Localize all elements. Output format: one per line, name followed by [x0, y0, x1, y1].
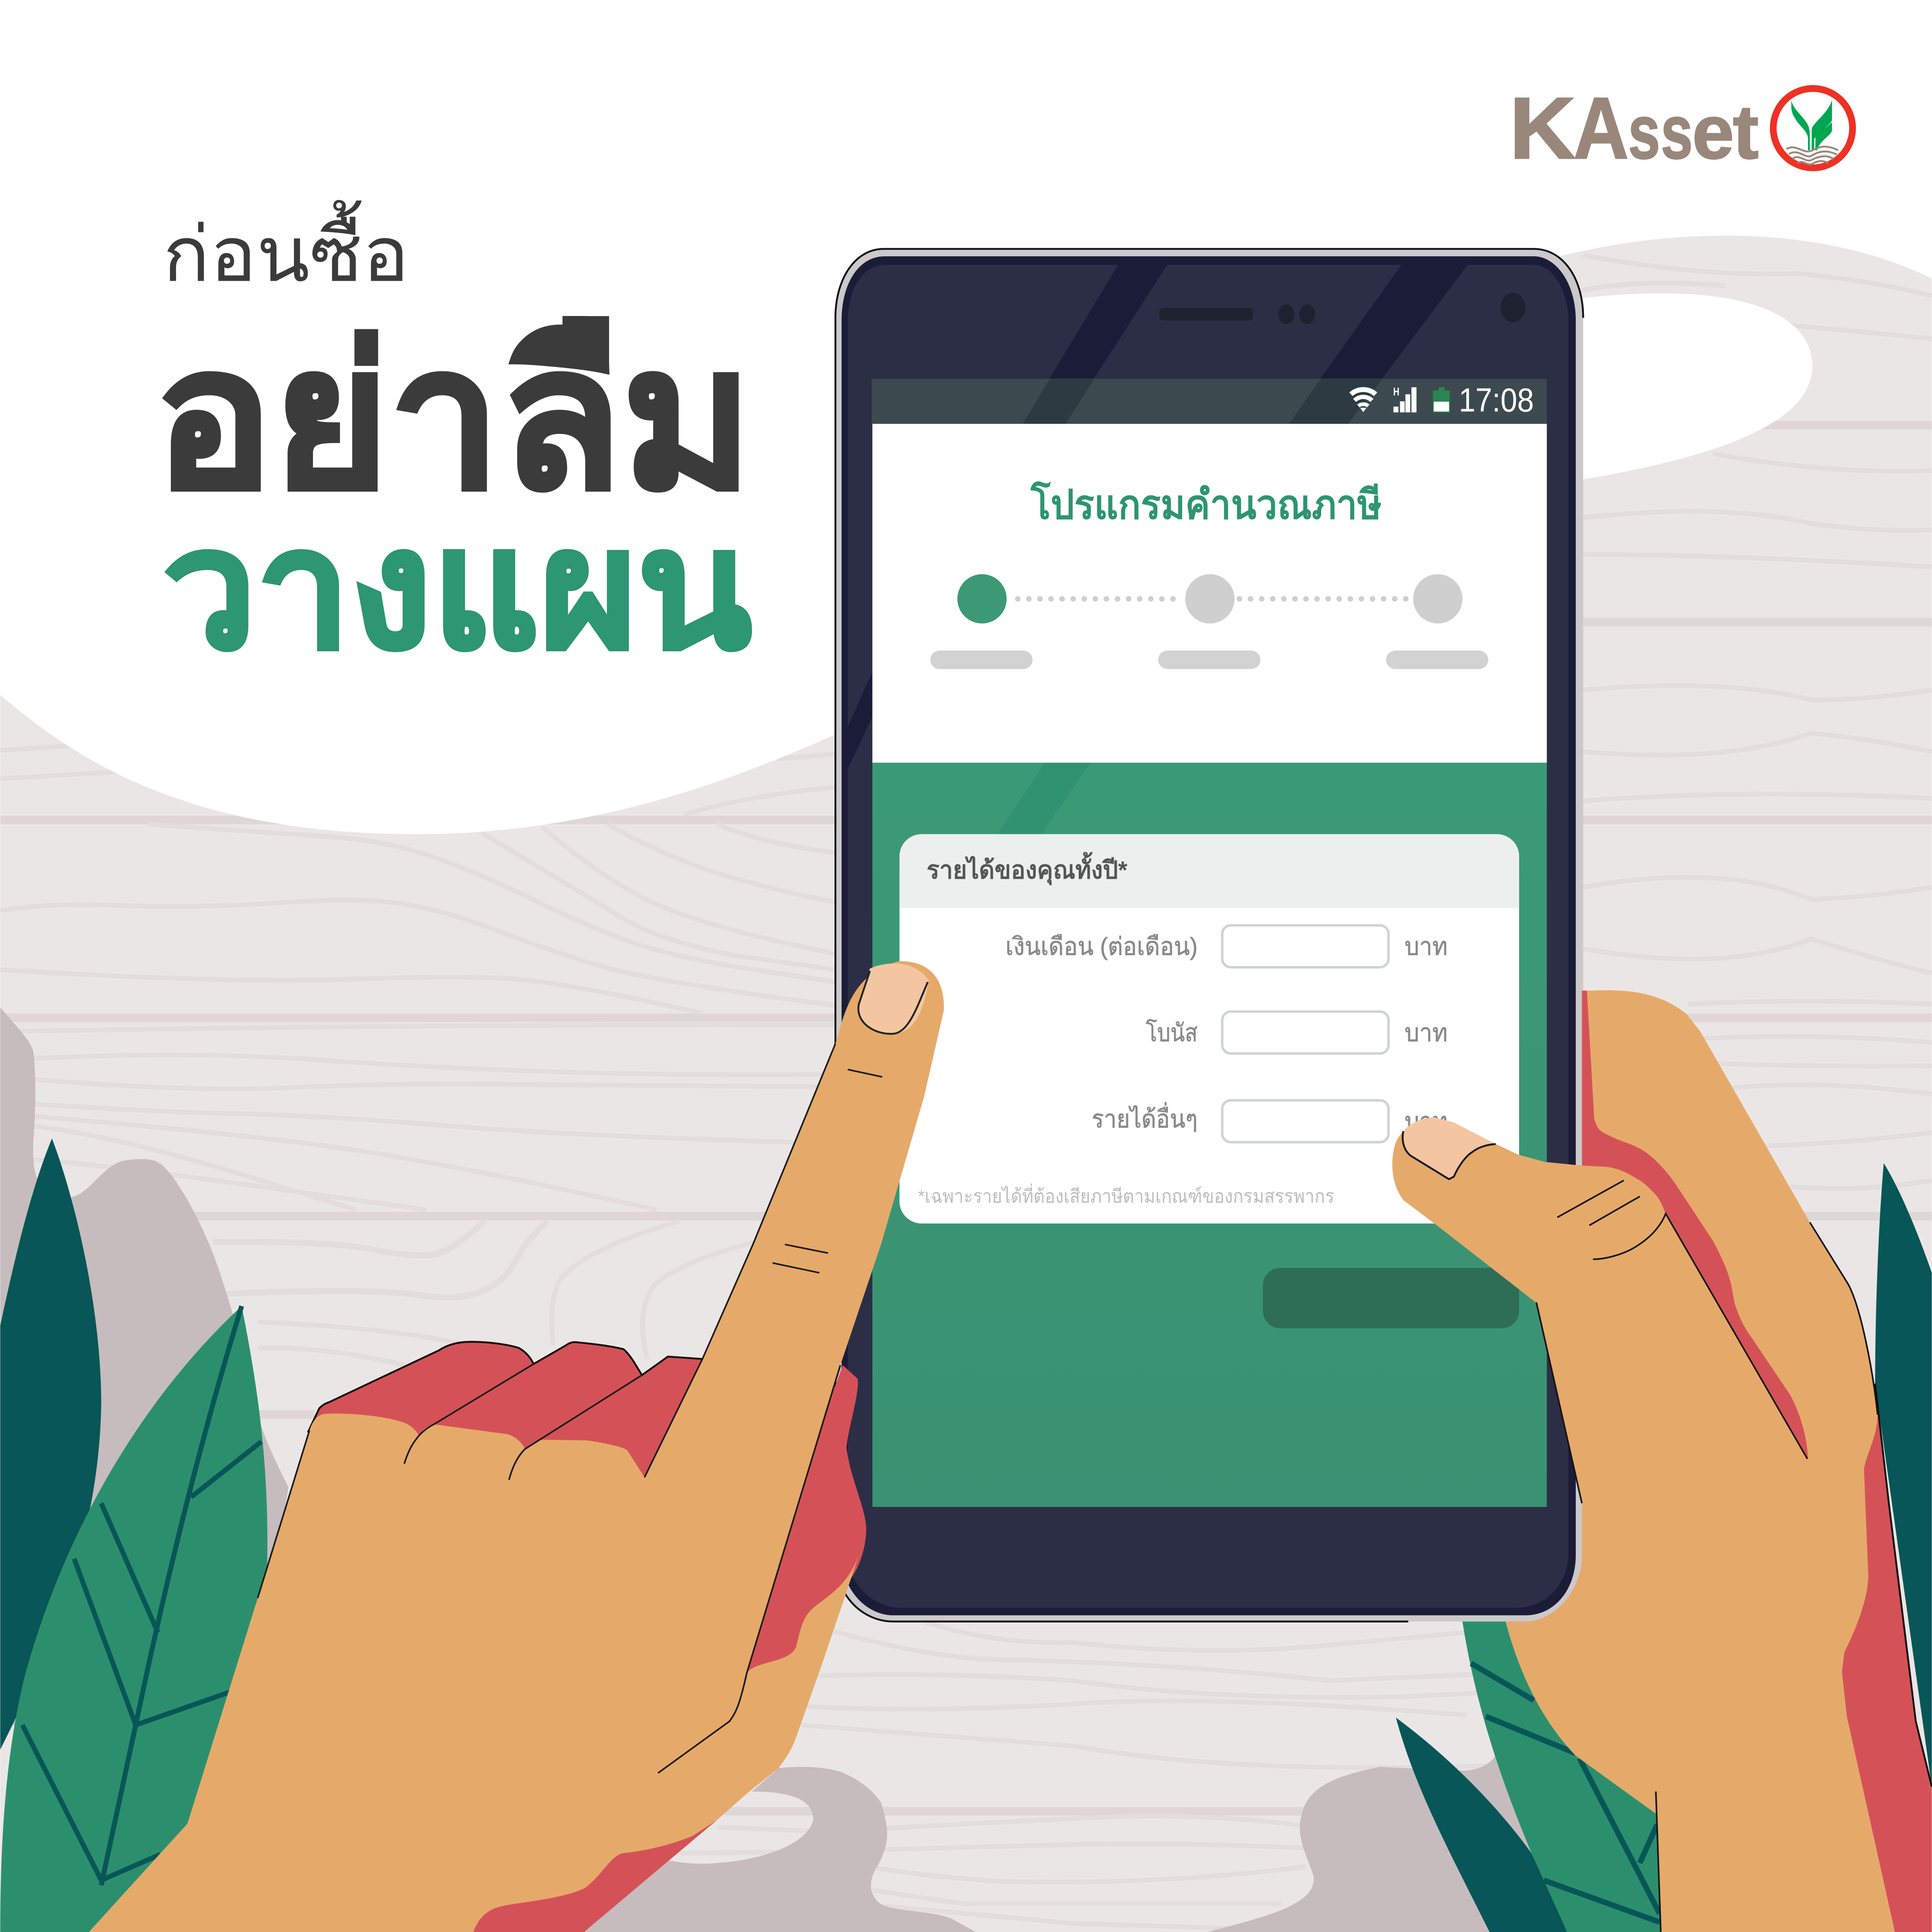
screen white — [872, 424, 1547, 762]
sensors — [1278, 304, 1315, 324]
logo wordmark: e — [1692, 89, 1734, 175]
leaf: dark bottom right — [1396, 1718, 1567, 1932]
status bar — [872, 379, 1547, 424]
wrist shadow — [473, 1820, 717, 1932]
leaf: dark right — [1875, 1163, 1932, 1786]
hand skin — [1392, 990, 1895, 1932]
icon: signal: H — [1393, 386, 1399, 398]
grey rock left — [0, 1007, 288, 1725]
KAsset logo — [1509, 80, 1853, 177]
card header — [900, 834, 1519, 908]
thumbnail — [1403, 1118, 1496, 1179]
title line 1: ก่อนซื้อ — [163, 200, 409, 297]
row: other income: บาท — [1404, 1108, 1448, 1136]
hand creases — [1536, 1180, 1877, 1932]
clock: 17:08 — [1459, 382, 1534, 419]
phone — [835, 249, 1583, 1622]
income card — [900, 834, 1519, 1224]
step indicator — [930, 574, 1488, 669]
folded fingers — [308, 1342, 704, 1491]
left hand — [89, 961, 944, 1932]
screen green — [872, 762, 1547, 1507]
row: bonus: บาท — [1404, 1019, 1448, 1047]
footnote: *เฉพาะรายได้ที่ต้องเสียภาษีตามเกณฑ์ของกรมสรรพากร — [918, 1184, 1335, 1207]
card heading: รายได้ของคุณทั้งปี* — [927, 852, 1128, 886]
logo wordmark: K — [1509, 80, 1576, 177]
icon: wifi — [1351, 389, 1376, 412]
logo wordmark: s — [1661, 89, 1693, 175]
title — [154, 200, 753, 683]
leaf: green left — [0, 1306, 267, 1932]
row: bonus: โบนัส — [1146, 1019, 1198, 1047]
title line 2: อย่าลืม — [154, 309, 753, 529]
screen glare — [998, 762, 1090, 834]
fingernail — [858, 963, 929, 1034]
icon: battery — [1433, 387, 1450, 413]
camera — [1501, 293, 1525, 322]
leaf: green bottom right — [1462, 1622, 1661, 1932]
title line 3: วางแผน — [163, 497, 752, 683]
row: salary — [1005, 925, 1448, 967]
grey rock bottom centre — [584, 1767, 976, 1932]
hand skin — [89, 961, 944, 1932]
logo wordmark — [1509, 80, 1759, 177]
next button — [1263, 1268, 1519, 1328]
grey rock bottom right — [1207, 1755, 1567, 1932]
logo wordmark: A — [1573, 80, 1629, 177]
screen title: โปรแกรมคำนวณภาษี — [1030, 481, 1382, 528]
logo wordmark: s — [1628, 89, 1660, 175]
logo wordmark: t — [1733, 89, 1759, 175]
phone body — [835, 249, 1583, 1622]
row: salary: บาท — [1404, 933, 1448, 960]
leaf: dark left — [0, 1139, 101, 1750]
finger creases — [258, 1044, 882, 1773]
icon: signal — [1393, 386, 1416, 413]
thumb side red — [1582, 990, 1808, 1459]
row: other income: รายได้อื่นๆ — [1092, 1102, 1198, 1133]
right hand — [1392, 990, 1932, 1932]
hand red side — [1842, 1384, 1932, 1932]
bezel glare — [1050, 264, 1468, 378]
speaker — [1159, 308, 1253, 320]
white top shape — [0, 0, 1932, 834]
row: salary: เงินเดือน (ต่อเดือน) — [1005, 933, 1198, 960]
row: other income — [1092, 1100, 1448, 1142]
wrist edge line — [1875, 1384, 1932, 1786]
row: bonus — [1146, 1012, 1448, 1054]
palm side — [739, 1365, 866, 1688]
logo emblem — [1773, 88, 1853, 168]
